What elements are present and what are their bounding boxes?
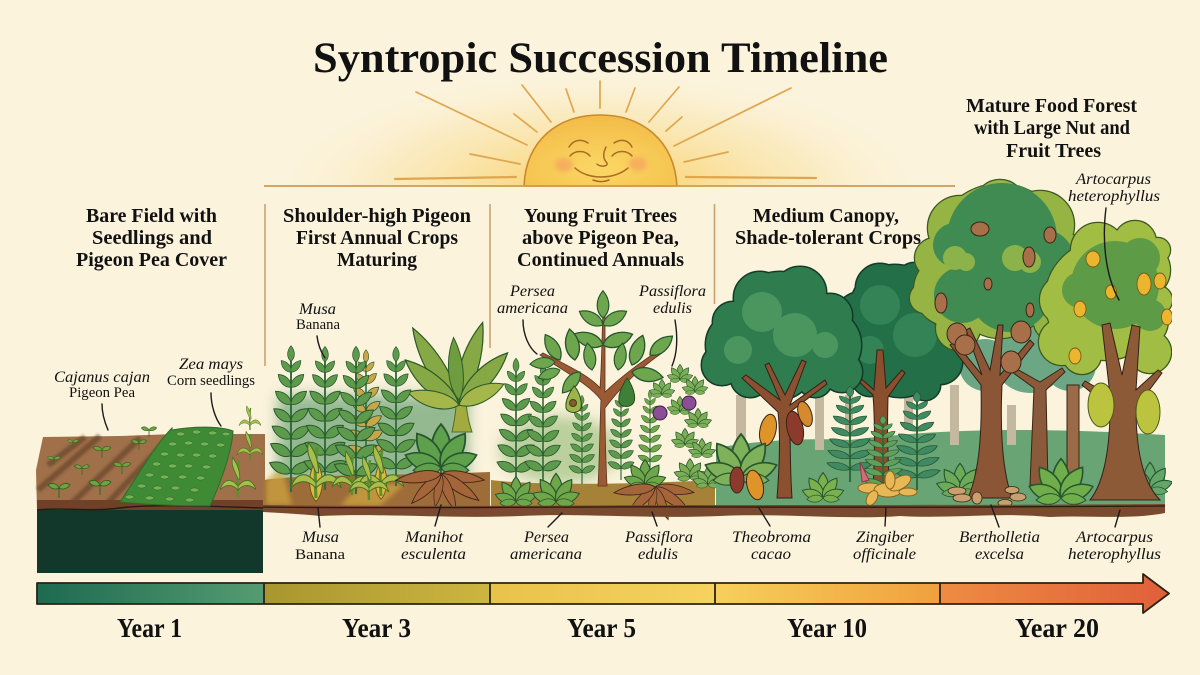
brazil nuts on ground: [948, 486, 1026, 506]
sun cheeks: [555, 157, 647, 172]
pigeon pea plants: [495, 358, 635, 488]
stage heading: year 20: with Large Nut and: [974, 117, 1130, 139]
label: Passiflora edulis: Passiflora: [638, 283, 706, 300]
stage heading: year 5: Continued Annuals: [517, 249, 684, 271]
low annual plants: [494, 390, 667, 507]
label: Persea americana: americana: [510, 546, 582, 563]
label: Zea mays: Corn seedlings: [167, 373, 255, 389]
label: Cajanus cajan: Cajanus cajan: [54, 369, 150, 386]
label: Passiflora edulis: edulis: [638, 546, 678, 563]
tree: cacao: [702, 267, 862, 498]
panel: year 5 planting: [491, 291, 724, 521]
label: Persea americana: [497, 283, 568, 354]
label: Musa: Musa: [298, 301, 336, 318]
plants under canopy: [703, 386, 1174, 506]
tree: mid background canopy: [959, 317, 1096, 485]
stage heading: year 3: First Annual Crops: [296, 227, 458, 249]
label: Zingiber officinale: Zingiber: [856, 529, 915, 546]
stage heading: year 1: Bare Field with: [86, 205, 217, 227]
avocado fruits: [566, 378, 635, 412]
label: Artocarpus heterophyllus: heterophyllus: [1068, 546, 1161, 563]
pale background trunks: [736, 385, 1016, 450]
label: Persea americana: Persea: [509, 283, 555, 300]
year labels: Year 1: [117, 613, 182, 643]
label: Cajanus cajan: [54, 369, 150, 430]
tilled soil: [36, 434, 265, 510]
jackfruit on trunk: [1088, 383, 1160, 434]
ginger root: [858, 462, 917, 507]
stage dividers: [265, 204, 714, 366]
upper species labels: [54, 171, 1160, 430]
title: Syntropic Succession Timeline: [313, 35, 888, 82]
label: Persea americana: americana: [497, 300, 568, 317]
cassava roots: [613, 482, 695, 521]
illustration: smiling sun on horizon: [330, 71, 870, 187]
stage heading: year 5: Young Fruit Trees: [524, 205, 677, 227]
label: Zingiber officinale: [853, 508, 916, 563]
cassava plant and roots: [395, 424, 485, 512]
stage heading: year 20: Mature Food Forest: [966, 95, 1137, 117]
label: Theobroma cacao: cacao: [751, 546, 791, 563]
lower species labels: [295, 505, 1161, 563]
label: Artocarpus heterophyllus top: heterophyllus: [1068, 188, 1160, 205]
stage heading: year 3: Shoulder-high Pigeon: [283, 205, 471, 227]
label: Bertholletia excelsa: excelsa: [975, 546, 1024, 563]
corn plants: [291, 442, 404, 501]
panel: year 1 soil profile: [36, 406, 265, 573]
label: Manihot esculenta: Manihot: [404, 529, 464, 546]
pigeon pea seedlings: [47, 427, 157, 498]
corn seedlings: [220, 406, 263, 497]
stage heading: year 3: [283, 205, 471, 271]
label: Cajanus cajan: Pigeon Pea: [69, 385, 136, 401]
label: Manihot esculenta: esculenta: [401, 546, 466, 563]
tree: jackfruit: [1039, 221, 1172, 500]
label: Passiflora edulis: [624, 512, 693, 563]
dark subsoil block: [37, 510, 263, 573]
label: Zea mays: [167, 356, 255, 426]
stage heading: year 10: Medium Canopy,: [753, 205, 899, 227]
year labels: Year 10: [787, 613, 867, 643]
label: Manihot esculenta: [401, 505, 466, 563]
label: Bertholletia excelsa: [959, 505, 1040, 563]
stage heading: year 3: Maturing: [337, 249, 417, 271]
panel: year 10 and year 20 forest: [702, 180, 1174, 508]
label: Artocarpus heterophyllus: [1068, 510, 1161, 563]
pigeon pea cover patch: [120, 427, 233, 506]
label: Artocarpus heterophyllus top: Artocarpus: [1075, 171, 1151, 188]
stage heading: year 20: Fruit Trees: [1006, 140, 1101, 162]
year labels: Year 3: [342, 613, 411, 643]
passion fruit vine: [648, 364, 724, 489]
label: Bertholletia excelsa: Bertholletia: [959, 529, 1040, 546]
stage heading: year 10: [735, 205, 921, 249]
avocado tree: [529, 291, 677, 486]
stage heading: year 1: [76, 205, 227, 271]
stage heading: year 10: Shade-tolerant Crops: [735, 227, 921, 249]
cacao pods on trunk: [758, 401, 813, 446]
label: Theobroma cacao: Theobroma: [732, 529, 811, 546]
understory background: [716, 430, 1165, 508]
tree: medium canopy back: [844, 262, 964, 483]
horizon line: [264, 185, 955, 187]
label: Artocarpus heterophyllus: Artocarpus: [1075, 529, 1153, 546]
timeline arrow bar: [37, 574, 1169, 613]
sun face: [569, 140, 632, 182]
label: Passiflora edulis: [638, 283, 706, 366]
label: Musa banana: [295, 508, 346, 563]
year labels: [117, 613, 1099, 643]
label: Musa: [296, 301, 341, 358]
green haze and soil: [500, 416, 620, 484]
small yellow fruits: [1069, 251, 1172, 364]
label: Musa banana: Musa: [301, 529, 339, 546]
ground line: [263, 504, 1165, 517]
stage heading: year 20: [966, 95, 1137, 162]
stage heading: year 5: above Pigeon Pea,: [522, 227, 679, 249]
panel: year 3 planting: [264, 320, 514, 512]
label: Zea mays: Zea mays: [179, 356, 243, 373]
label: Passiflora edulis: edulis: [653, 300, 692, 317]
stage heading: year 1: Seedlings and: [92, 227, 212, 249]
cacao pods on ground: [730, 467, 766, 501]
label: Musa banana: Banana: [295, 547, 346, 563]
label: Passiflora edulis: Passiflora: [624, 529, 693, 546]
tree: brazil nut: [910, 180, 1082, 506]
label: Zingiber officinale: officinale: [853, 546, 916, 563]
label: Musa: Banana: [296, 317, 341, 333]
brazil nut pods: [935, 222, 1056, 373]
stage heading: year 1: Pigeon Pea Cover: [76, 249, 227, 271]
year labels: Year 5: [567, 613, 636, 643]
label: Theobroma cacao: [732, 508, 811, 563]
banana plant: [399, 320, 514, 432]
year labels: Year 20: [1015, 613, 1099, 643]
green haze and soil: [278, 395, 468, 485]
pigeon pea plants: [267, 346, 418, 494]
label: Persea americana: [510, 513, 582, 563]
label: Persea americana: Persea: [523, 529, 569, 546]
label: Artocarpus heterophyllus top: [1068, 171, 1160, 300]
stage heading: year 5: [517, 205, 684, 271]
